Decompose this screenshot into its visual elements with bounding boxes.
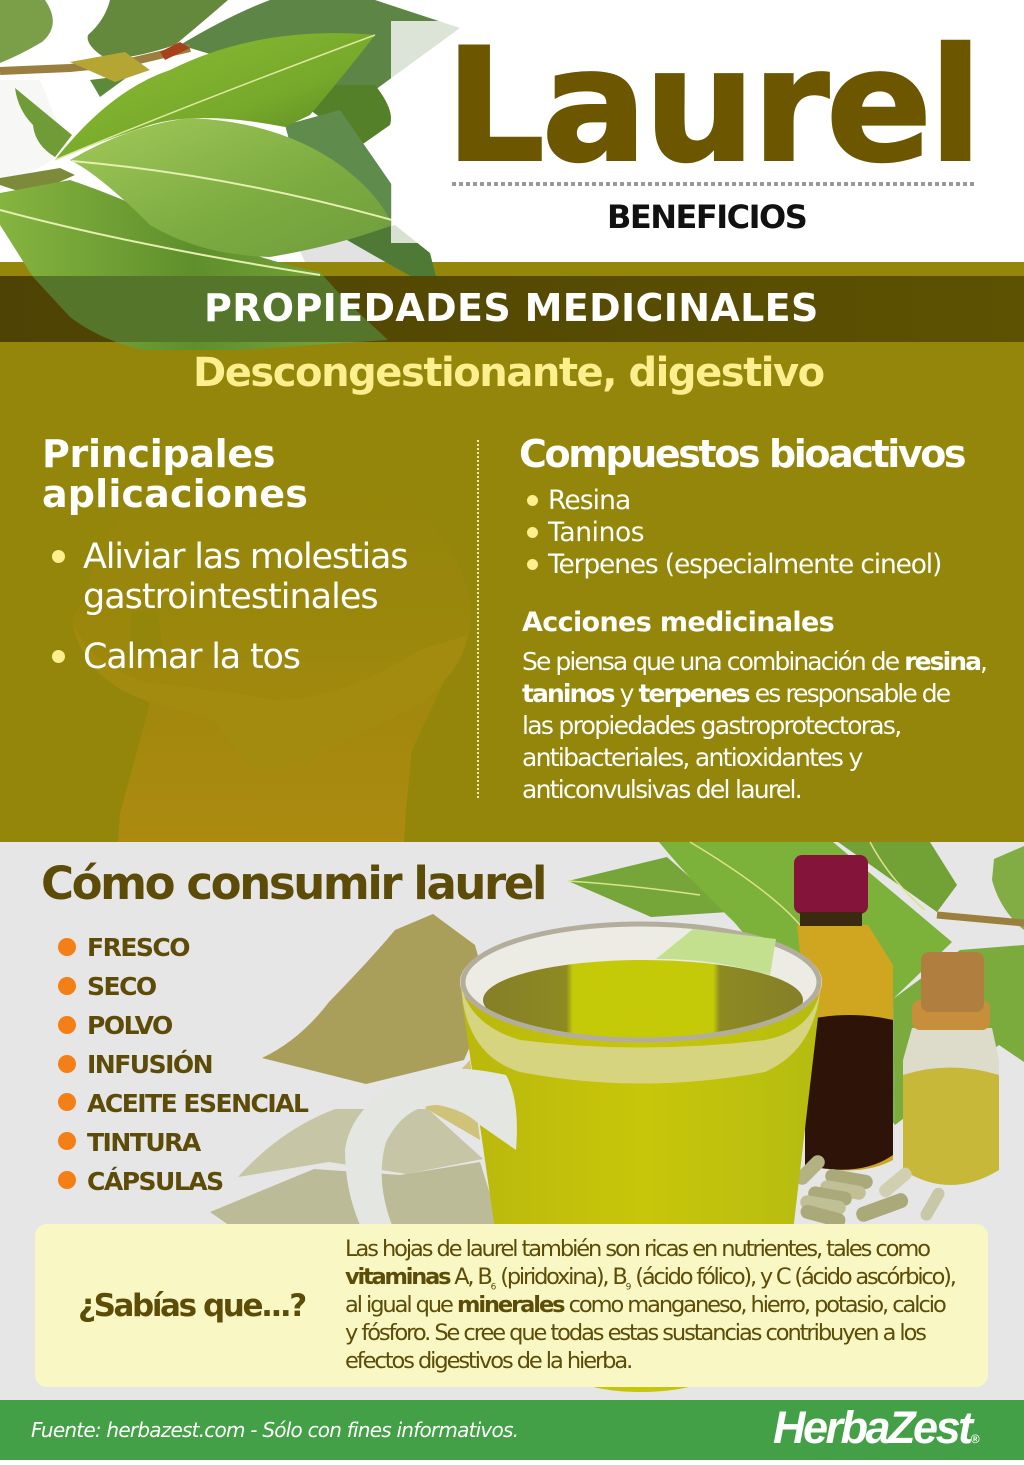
panel: applications bbox=[42, 432, 407, 677]
person silhouette bbox=[72, 457, 471, 842]
compounds heading: Compuestos bioactivos bbox=[519, 432, 964, 476]
list: consumption forms: TINTURA bbox=[87, 1128, 200, 1157]
did you know text bbox=[345, 1236, 955, 1374]
list: consumption forms: POLVO bbox=[87, 1011, 172, 1040]
medicinal actions text: las propiedades gastroprotectoras, bbox=[522, 711, 900, 740]
tea cup bbox=[345, 922, 822, 1392]
compounds list: Taninos bbox=[548, 517, 644, 548]
subtitle: BENEFICIOS bbox=[607, 198, 806, 236]
list: consumption forms: FRESCO bbox=[87, 933, 189, 962]
heading: how to consume: Cómo consumir laurel bbox=[41, 857, 545, 910]
applications list: Aliviar las molestias bbox=[83, 537, 407, 577]
applications list: Calmar la tos bbox=[83, 637, 300, 677]
logo: HerbaZest: HerbaZest® bbox=[773, 1402, 979, 1453]
compounds list: Resina bbox=[548, 485, 630, 516]
top leaves bbox=[0, 0, 461, 350]
list: consumption forms: SECO bbox=[87, 972, 156, 1001]
applications heading: Principales bbox=[42, 432, 275, 476]
leaf under band bbox=[32, 276, 388, 342]
footer bbox=[0, 1400, 1024, 1460]
column divider bbox=[477, 440, 479, 800]
panel: compounds bbox=[519, 432, 986, 804]
list: consumption forms: ACEITE ESENCIAL bbox=[87, 1089, 307, 1118]
dark title band bbox=[0, 276, 1024, 342]
olive panel bbox=[0, 262, 1024, 842]
callout panel bbox=[35, 1224, 988, 1387]
capsules bbox=[792, 1152, 947, 1229]
applications list bbox=[52, 537, 407, 677]
medicinal actions heading: Acciones medicinales bbox=[522, 607, 834, 638]
applications heading bbox=[42, 432, 308, 516]
small oil bottle bbox=[903, 952, 999, 1185]
dried leaves bbox=[210, 1060, 500, 1226]
fresh leaves bbox=[568, 842, 1024, 1125]
medicinal actions text: Se piensa que una combinación de resina, bbox=[522, 647, 986, 676]
did you know text: Las hojas de laurel también son ricas en nutrientes, tales como bbox=[345, 1236, 929, 1262]
medicinal actions text bbox=[522, 647, 986, 804]
grey panel bbox=[0, 842, 1024, 1400]
compounds list: Terpenes (especialmente cineol) bbox=[548, 549, 941, 580]
powder pile bbox=[262, 914, 490, 1084]
medicinal actions text: antibacteriales, antioxidantes y bbox=[522, 743, 862, 772]
did you know text: y fósforo. Se cree que todas estas sustancias contribuyen a los bbox=[345, 1320, 925, 1346]
medicinal actions text: anticonvulsivas del laurel. bbox=[522, 775, 801, 804]
tincture bottle bbox=[794, 855, 893, 1170]
compounds list bbox=[527, 485, 941, 580]
list: consumption forms bbox=[58, 933, 308, 1196]
medicinal actions text: taninos y terpenes es responsable de bbox=[522, 679, 949, 708]
source note: Fuente: herbazest.com - Sólo con fines informativos. bbox=[31, 1418, 518, 1442]
did you know heading: ¿Sabías que...? bbox=[78, 1288, 305, 1324]
list: consumption forms: INFUSIÓN bbox=[87, 1050, 212, 1079]
did you know text: al igual que minerales como manganeso, hierro, potasio, calcio bbox=[345, 1292, 945, 1318]
applications heading: aplicaciones bbox=[42, 472, 308, 516]
properties: Descongestionante, digestivo bbox=[193, 350, 824, 396]
did you know text: vitaminas A, B6 (piridoxina), B9 (ácido fólico), y C (ácido ascórbico), bbox=[345, 1264, 955, 1292]
band heading: PROPIEDADES MEDICINALES bbox=[204, 286, 819, 330]
did you know text: efectos digestivos de la hierba. bbox=[345, 1348, 631, 1374]
dotted divider bbox=[452, 182, 976, 186]
list: consumption forms: CÁPSULAS bbox=[87, 1167, 223, 1196]
title: Laurel bbox=[445, 15, 979, 198]
applications list: gastrointestinales bbox=[83, 577, 378, 617]
